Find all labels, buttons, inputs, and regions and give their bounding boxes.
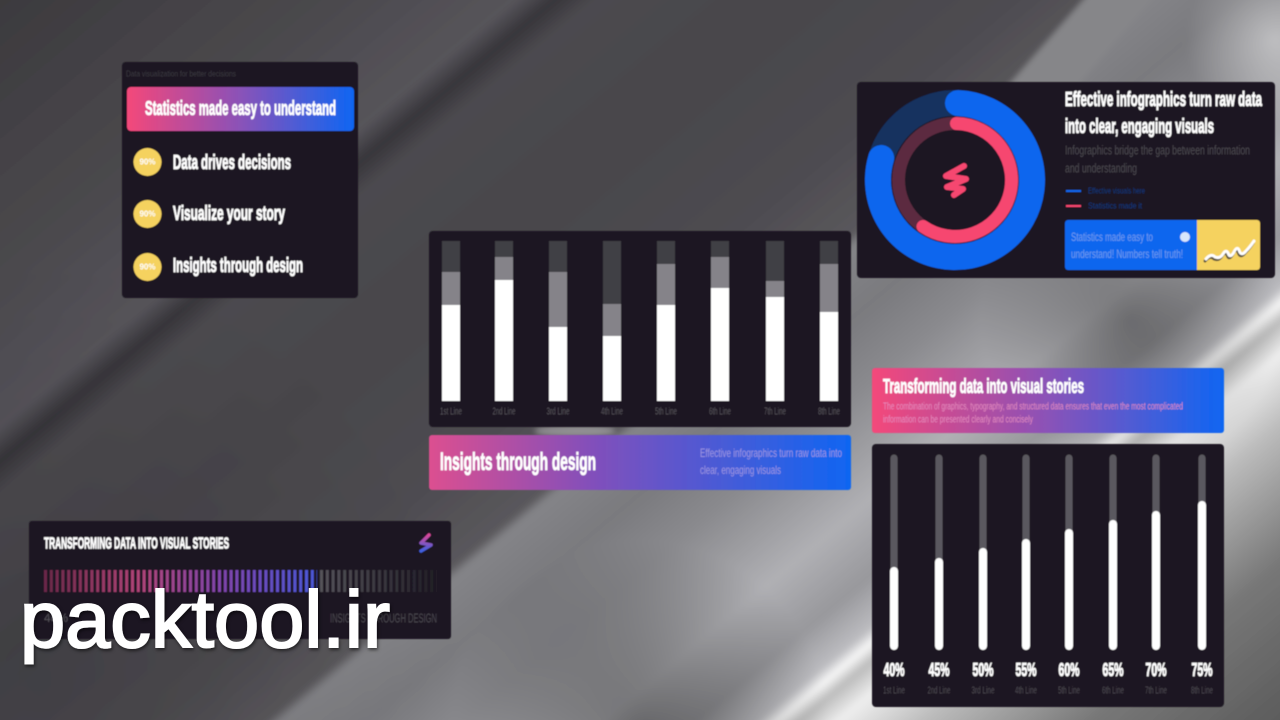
percent labels: 45% xyxy=(928,660,950,680)
axis labels: 4th Line xyxy=(1015,686,1037,696)
banner: insights through design: Effective infographics turn raw data into xyxy=(700,446,842,460)
description: and understanding xyxy=(1065,160,1137,176)
panel: stacked bar chart xyxy=(429,231,851,427)
gradient header: Statistics made easy to understand xyxy=(145,98,336,120)
callout: blue box: understand! Numbers tell truth! xyxy=(1071,247,1183,261)
axis labels: 8th Line xyxy=(1191,686,1213,696)
axis labels: 1st Line xyxy=(883,686,905,696)
secondary series xyxy=(442,257,838,337)
gradient header xyxy=(127,87,354,131)
list item: visualize your story xyxy=(134,200,286,228)
axis labels: 6th Line xyxy=(1102,686,1124,696)
description xyxy=(1065,142,1250,176)
list item: insights through design xyxy=(134,253,303,281)
percent labels: 50% xyxy=(972,660,994,680)
axis labels xyxy=(440,406,840,418)
legend: Statistics made it xyxy=(1088,202,1143,210)
percent labels: 65% xyxy=(1102,660,1124,680)
title: TRANSFORMING DATA INTO VISUAL STORIES xyxy=(44,536,229,552)
banner: transforming data: Transforming data into visual stories xyxy=(883,376,1084,398)
watermark: packtool.ir xyxy=(20,575,390,664)
bar tracks xyxy=(894,458,1202,646)
banner: transforming data xyxy=(872,368,1224,433)
progress ticks filled xyxy=(44,570,317,592)
axis labels: 3rd Line xyxy=(972,686,995,696)
callout: blue box: Statistics made easy to xyxy=(1071,230,1153,244)
axis labels: 5th Line xyxy=(655,406,677,418)
list item: visualize your story: Visualize your story xyxy=(173,203,286,225)
axis labels: 7th Line xyxy=(1145,686,1167,696)
callout: blue box xyxy=(1065,220,1201,270)
percent labels: 60% xyxy=(1058,660,1080,680)
primary series xyxy=(442,280,838,401)
axis labels xyxy=(883,686,1213,696)
list item: data drives decisions: 90% xyxy=(139,158,156,166)
legend xyxy=(1066,186,1145,210)
axis labels: 2nd Line xyxy=(928,686,951,696)
left value: 40% xyxy=(44,611,68,625)
list item: visualize your story: 90% xyxy=(139,210,156,218)
legend: Effective visuals here xyxy=(1088,186,1145,196)
heading xyxy=(1065,89,1263,138)
banner: insights through design: clear, engaging visuals xyxy=(700,463,781,477)
list item: insights through design: 90% xyxy=(139,262,156,272)
icon: squiggle gradient xyxy=(421,535,431,551)
bar values xyxy=(894,505,1202,646)
axis labels: 1st Line xyxy=(440,406,462,418)
banner: insights through design: Insights through design xyxy=(440,448,596,476)
percent labels xyxy=(884,660,1212,680)
percent labels: 70% xyxy=(1146,660,1166,680)
panel: progress strip xyxy=(29,521,451,639)
list item: insights through design: Insights through design xyxy=(173,255,303,277)
percent labels: 55% xyxy=(1016,660,1036,680)
panel caption: Data visualization for better decisions xyxy=(126,70,236,78)
panel: rounded bar chart xyxy=(872,444,1224,707)
axis labels: 6th Line xyxy=(709,406,731,418)
icon: squiggle xyxy=(946,166,966,195)
axis labels: 4th Line xyxy=(601,406,623,418)
banner: insights through design xyxy=(429,435,851,490)
axis labels: 7th Line xyxy=(764,406,786,418)
axis labels: 2nd Line xyxy=(492,406,516,418)
progress ticks empty xyxy=(320,570,437,592)
axis labels: 5th Line xyxy=(1058,686,1080,696)
axis labels: 8th Line xyxy=(818,406,840,418)
panel: statistics list xyxy=(122,62,358,298)
right caption: INSIGHTS THROUGH DESIGN xyxy=(330,610,437,626)
list item: data drives decisions xyxy=(134,148,291,176)
banner: transforming data: information can be presented clearly and concisely xyxy=(883,414,1033,426)
axis labels: 3rd Line xyxy=(546,406,570,418)
callout: yellow sparkline xyxy=(1197,220,1260,270)
donut chart xyxy=(878,103,1032,257)
bar tracks xyxy=(442,241,838,401)
list item: data drives decisions: Data drives decisions xyxy=(173,152,291,174)
percent labels: 40% xyxy=(884,660,904,680)
percent labels: 75% xyxy=(1192,660,1212,680)
panel: donut chart and summary xyxy=(857,82,1275,278)
